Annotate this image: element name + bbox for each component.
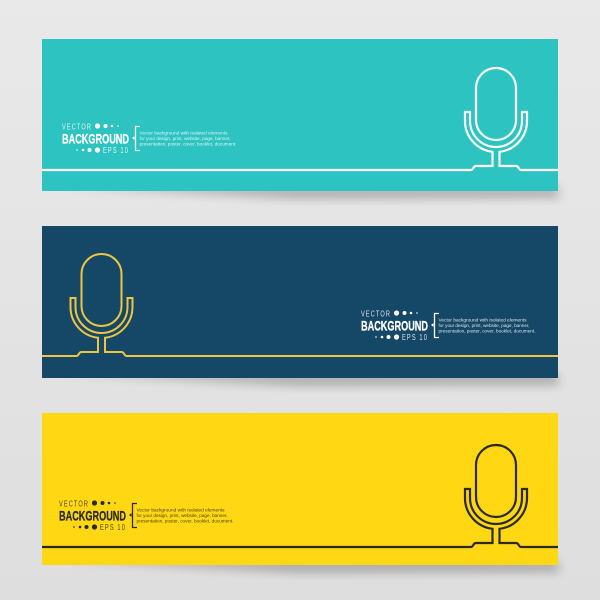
text block: vector background label: BACKGROUND [59, 507, 126, 523]
text block: vector background label: Vector background with isolated elements [136, 508, 225, 514]
text block: vector background label: presentation, poster, cover, booklet, document. [140, 142, 236, 148]
text block: vector background label [361, 308, 536, 342]
text block: vector background label: EPS 10 [103, 145, 129, 155]
icon: microphone line art, yellow [42, 254, 558, 356]
panel: teal banner [42, 39, 560, 199]
text block: vector background label: VECTOR [62, 122, 92, 132]
text block: vector background label [62, 122, 236, 155]
text block: vector background label: EPS 10 [100, 522, 126, 532]
text block: vector background label: BACKGROUND [361, 317, 428, 333]
text block: vector background label: for your design, print, website, page, banner, [136, 513, 228, 519]
text block: vector background label: VECTOR [59, 498, 89, 508]
text block: vector background label: presentation, poster, cover, booklet, document. [136, 518, 234, 524]
panel: yellow banner [42, 413, 560, 573]
icon: microphone line art, dark [42, 445, 558, 547]
text block: vector background label: EPS 10 [402, 332, 428, 342]
text block: vector background label: Vector background with isolated elements [140, 130, 228, 136]
panel: navy banner [42, 226, 560, 386]
text block: vector background label: VECTOR [361, 308, 391, 318]
text block: vector background label: Vector background with isolated elements [438, 318, 527, 324]
text block: vector background label: for your design, print, website, page, banner, [438, 323, 530, 329]
text block: vector background label [59, 498, 234, 532]
text block: vector background label: BACKGROUND [62, 130, 129, 146]
text block: vector background label: presentation, poster, cover, booklet, document. [438, 328, 536, 334]
icon: microphone line art, white [42, 68, 558, 170]
text block: vector background label: for your design, print, website, page, banner, [140, 136, 230, 142]
